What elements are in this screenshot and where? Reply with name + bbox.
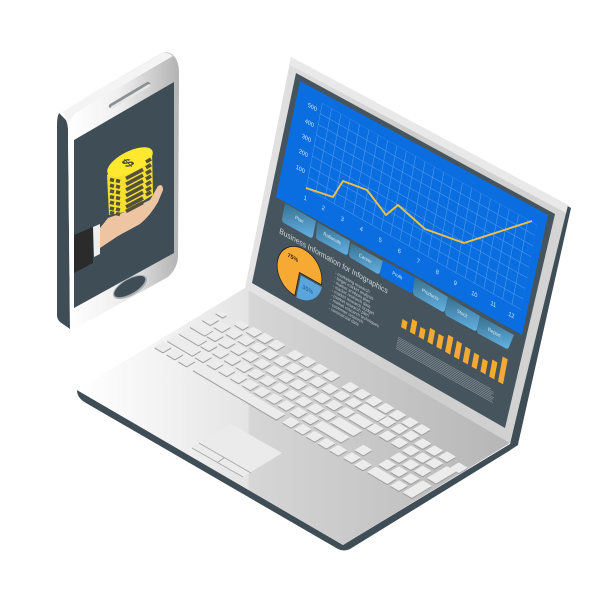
screen bezel xyxy=(252,73,555,428)
bullet list: - market research techniques xyxy=(330,296,379,329)
bullet list: - target market analysis xyxy=(334,274,374,301)
trackpad xyxy=(192,424,282,477)
tab: Profit xyxy=(380,260,416,293)
x axis labels: 1 xyxy=(303,195,308,203)
icon: sleeve xyxy=(74,227,93,273)
chart line xyxy=(306,181,532,243)
bullet list: - market research data xyxy=(332,283,372,310)
phone screen xyxy=(74,82,174,308)
x axis labels: 4 xyxy=(359,226,364,234)
y axis labels: 300 xyxy=(301,134,312,145)
icon: coin stack: $ xyxy=(119,156,138,170)
tab: Rationale xyxy=(316,222,350,255)
phone top bevel highlight xyxy=(62,53,173,124)
tab: Career: Career xyxy=(358,252,372,266)
x axis labels: 8 xyxy=(435,269,440,277)
phone xyxy=(57,52,179,329)
bullet list: - customer research xyxy=(329,301,364,325)
x axis labels: 12 xyxy=(508,311,515,321)
pie label 75%: 75% xyxy=(287,253,299,265)
screen blue chart area xyxy=(276,81,548,335)
tabs xyxy=(282,203,514,349)
keyboard xyxy=(154,306,482,502)
phone speaker xyxy=(111,84,149,108)
chart grid xyxy=(306,103,537,310)
bullet list: - market research plan xyxy=(331,292,370,318)
x axis labels: 9 xyxy=(453,280,458,288)
tab: Report: Report xyxy=(487,327,502,340)
y axis labels: 500 xyxy=(307,103,318,114)
laptop base surface xyxy=(77,288,510,545)
tab: Plan xyxy=(282,203,316,238)
y axis labels: 200 xyxy=(298,149,309,160)
phone body xyxy=(60,52,179,329)
x axis labels: 7 xyxy=(416,258,421,266)
icon: hand xyxy=(100,185,163,248)
tab: Stock: Stock xyxy=(456,308,468,320)
tab: Products: Products xyxy=(421,287,439,303)
tab: Plan: Plan xyxy=(294,215,304,225)
pie slice 35% xyxy=(296,275,322,309)
x axis labels: 5 xyxy=(378,237,383,245)
paragraph block under bars xyxy=(396,337,495,403)
tab: Profit: Profit xyxy=(392,270,403,282)
bullet list xyxy=(328,270,379,329)
icon: coin stack xyxy=(103,141,157,215)
tab: Report xyxy=(477,316,514,349)
bullet list: - market research budget xyxy=(332,288,375,316)
x axis labels: 2 xyxy=(321,205,326,213)
heading: business information: Business Information for Infographics xyxy=(279,226,389,296)
pie slice 75% xyxy=(273,237,326,308)
bullet list: - market analysis plan xyxy=(333,279,371,305)
bullet list: - marketing research xyxy=(335,270,371,295)
bullet list: - commercial data xyxy=(328,305,360,327)
x axis labels xyxy=(303,195,515,321)
y axis labels: 400 xyxy=(304,119,315,130)
x axis labels: 3 xyxy=(340,216,345,224)
tab: Rationale: Rationale xyxy=(323,231,342,247)
tab: Career xyxy=(349,243,383,274)
x axis labels: 11 xyxy=(490,301,497,310)
laptop base dark edge xyxy=(77,390,519,550)
y axis labels xyxy=(295,103,318,176)
x axis labels: 6 xyxy=(397,248,402,256)
tab: Products xyxy=(413,277,448,312)
y axis labels: 100 xyxy=(295,165,306,176)
pie label 35%: 35% xyxy=(302,285,314,297)
lid right dark side xyxy=(510,205,571,444)
pie chart xyxy=(273,237,327,309)
laptop xyxy=(77,57,571,550)
icon: shirt cuff xyxy=(93,224,100,257)
phone home button xyxy=(109,270,151,304)
lid frame xyxy=(245,57,568,443)
x axis labels: 10 xyxy=(471,290,478,300)
tab: Stock xyxy=(445,297,480,331)
line chart xyxy=(295,103,537,321)
phone dark side xyxy=(57,113,70,329)
bar chart xyxy=(401,302,508,384)
lid top highlight xyxy=(290,57,568,213)
